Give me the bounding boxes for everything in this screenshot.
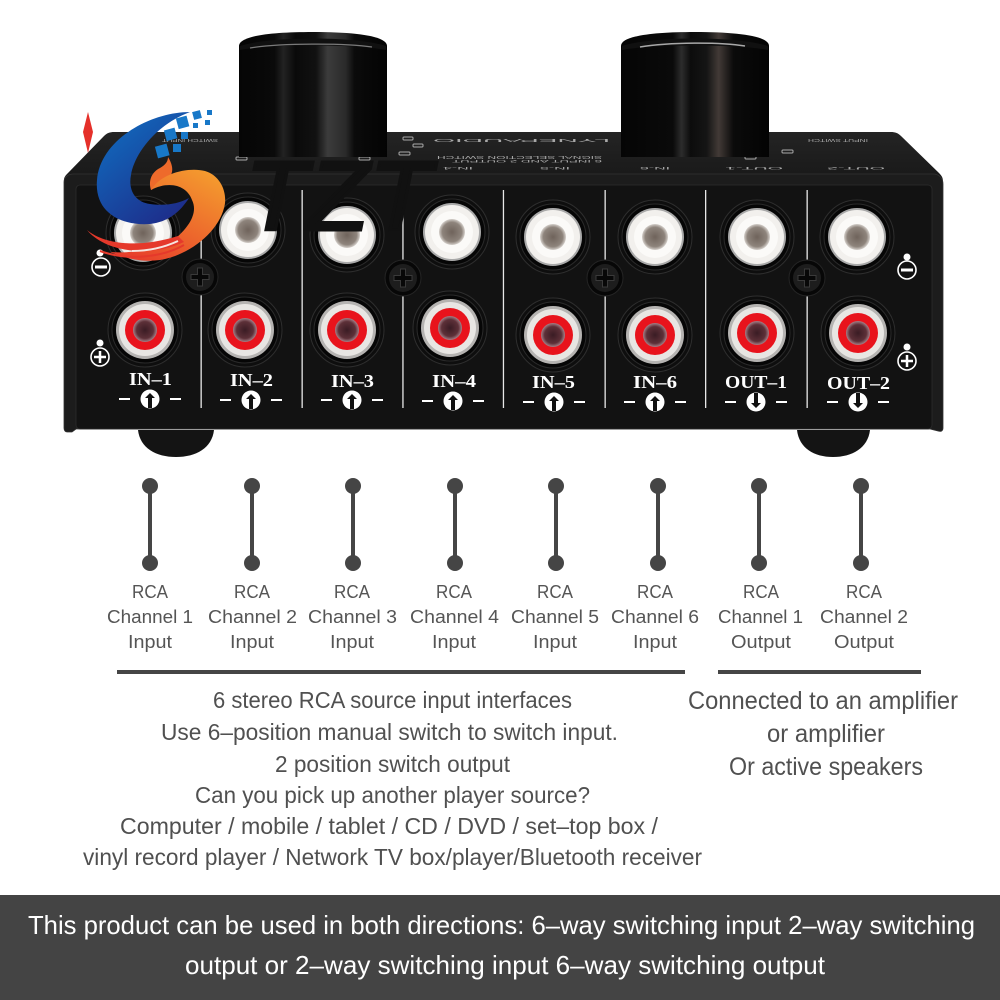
- label: input channel 2: [208, 581, 297, 652]
- input description text: Computer / mobile / tablet / CD / DVD / set–top box /: [120, 813, 659, 839]
- left knob: [239, 32, 387, 157]
- silkscreen: left and right small print: OUT-2: [826, 166, 885, 170]
- panel screws: [182, 259, 825, 296]
- label: input channel 1: Channel 1: [107, 606, 193, 627]
- silkscreen: left and right small print: INPUT SWITCH: [808, 137, 868, 142]
- label: input channel 5: Channel 5: [511, 606, 599, 627]
- silkscreen: left and right small print: OUT-1: [724, 166, 783, 170]
- label: input channel 6: [611, 581, 699, 652]
- label: input channel 3: RCA: [334, 581, 371, 602]
- label: input channel 2: RCA: [234, 581, 271, 602]
- panel dividers: [200, 190, 808, 408]
- port labels: IN–5: [532, 372, 575, 392]
- port labels: IN–3: [331, 371, 374, 391]
- label: input channel 4: Input: [432, 631, 476, 652]
- label: input channel 6: RCA: [637, 581, 674, 602]
- logo: red diamond: [83, 112, 93, 153]
- watermark logo: [83, 110, 437, 261]
- silkscreen: left and right small print: IN-5: [539, 166, 570, 170]
- top face of box: [64, 132, 943, 190]
- label: input channel 6: Channel 6: [611, 606, 699, 627]
- label: input channel 3: [308, 581, 397, 652]
- bottom banner: This product can be used in both directions: 6–way switching input 2–way switching: [28, 910, 975, 940]
- bracket rule: inputs: [117, 670, 685, 674]
- right knob: [621, 32, 769, 157]
- polarity marks: [91, 250, 916, 370]
- logo: flame: [150, 157, 172, 190]
- input description text: 6 stereo RCA source input interfaces: [213, 687, 572, 713]
- label: output channel 1: Output: [731, 631, 791, 652]
- label: input channel 2: Channel 2: [208, 606, 297, 627]
- input description text: Can you pick up another player source?: [195, 782, 590, 808]
- input description text: vinyl record player / Network TV box/player/Bluetooth receiver: [83, 844, 702, 870]
- logo: white streaks: [132, 241, 178, 251]
- label: input channel 4: Channel 4: [410, 606, 499, 627]
- input description text: 2 position switch output: [275, 751, 511, 777]
- silkscreen: left and right small print: SWITCH INPUT: [161, 137, 218, 142]
- port labels: [129, 369, 890, 393]
- bottom banner: [0, 895, 1000, 1000]
- label: input channel 3: Channel 3: [308, 606, 397, 627]
- label: output channel 2: Channel 2: [820, 606, 908, 627]
- label: input channel 5: RCA: [537, 581, 574, 602]
- silkscreen: brand name: LYNEPAUDIO: [433, 137, 610, 143]
- port direction icons: [119, 390, 889, 412]
- label: output channel 1: RCA: [743, 581, 780, 602]
- port labels: OUT–2: [827, 373, 890, 393]
- port labels: IN–6: [633, 372, 677, 392]
- port labels: IN–4: [432, 371, 476, 391]
- channel labels: [107, 581, 908, 652]
- label: output channel 2: [820, 581, 908, 652]
- port labels: IN–2: [230, 370, 273, 390]
- output description text: Or active speakers: [729, 753, 923, 781]
- logo: blue crescent: [97, 112, 190, 224]
- label: input channel 6: Input: [633, 631, 677, 652]
- output description text: or amplifier: [767, 720, 885, 748]
- silkscreen: left and right small print: [161, 137, 885, 170]
- label: output channel 1: Channel 1: [718, 606, 803, 627]
- bracket rule: outputs: [718, 670, 921, 674]
- label: input channel 2: Input: [230, 631, 274, 652]
- bottom banner: output or 2–way switching input 6–way switching output: [185, 950, 826, 980]
- label: input channel 1: RCA: [132, 581, 169, 602]
- label: input channel 4: RCA: [436, 581, 473, 602]
- label: input channel 1: Input: [128, 631, 172, 652]
- silkscreen: switch markers: [236, 137, 793, 160]
- label: input channel 1: [107, 581, 193, 652]
- logo: TZT letters: TZT: [245, 141, 437, 251]
- rubber feet: [138, 430, 870, 457]
- product photo: audio switch box: [64, 32, 943, 457]
- logo: orange swirl: [110, 170, 225, 261]
- port labels: OUT–1: [725, 372, 787, 392]
- silkscreen: product subtitle: 6 INPUT AND 2 OUTPUT: [452, 159, 602, 163]
- logo: pixel squares: [155, 110, 212, 158]
- port labels: IN–1: [129, 369, 172, 389]
- red RCA jacks: [108, 291, 895, 372]
- label: output channel 2: RCA: [846, 581, 883, 602]
- label: input channel 3: Input: [330, 631, 374, 652]
- input description text: Use 6–position manual switch to switch input.: [161, 719, 618, 745]
- logo: red swoosh: [87, 230, 184, 251]
- front panel: [76, 185, 932, 429]
- connector lines: [142, 478, 869, 571]
- silkscreen: left and right small print: IN-6: [639, 166, 670, 170]
- output description text: [688, 687, 958, 781]
- output description text: Connected to an amplifier: [688, 687, 958, 715]
- input description text: [83, 687, 702, 870]
- label: output channel 1: [718, 581, 803, 652]
- silkscreen: left and right small print: IN-4: [442, 166, 473, 170]
- logo: thin red streak: [100, 245, 184, 257]
- label: input channel 4: [410, 581, 499, 652]
- white RCA jacks: [106, 193, 894, 274]
- silkscreen: product title: SIGNAL SELECTION SWITCH: [437, 154, 602, 160]
- front panel frame: [64, 174, 943, 432]
- label: output channel 2: Output: [834, 631, 894, 652]
- label: input channel 5: [511, 581, 599, 652]
- label: input channel 5: Input: [533, 631, 577, 652]
